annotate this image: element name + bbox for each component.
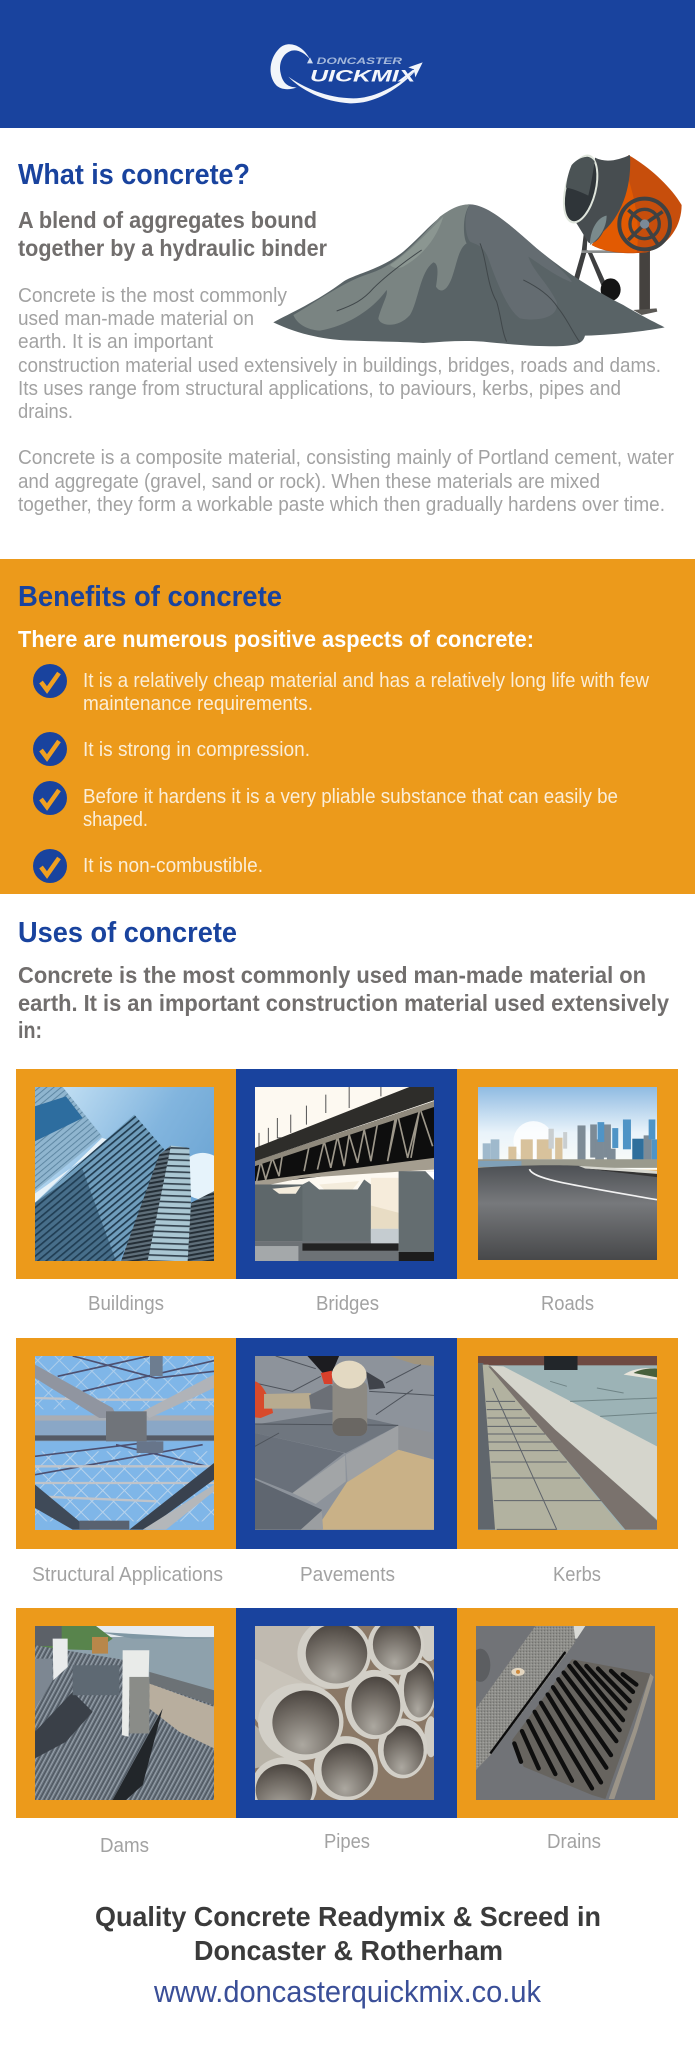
subheading: blend of aggregates: A blend of aggregates bound	[18, 207, 317, 233]
label: bridges: Bridges	[316, 1293, 379, 1315]
footer heading: Doncaster & Rotherham	[194, 1935, 503, 1966]
paragraph: most commonly used: construction material used extensively in buildings, bridges, roads and dams.	[18, 355, 661, 377]
heading: uses: Uses of concrete	[18, 917, 237, 949]
paragraph: composite material: Concrete is a composite material, consisting mainly of Portland cement, water	[18, 447, 674, 469]
photo: buildings	[35, 1087, 214, 1261]
benefit text 3: Before it hardens it is a very pliable substance that can easily be	[83, 786, 618, 808]
photo: pipes	[255, 1626, 434, 1800]
benefit text 2: It is strong in compression.	[83, 739, 310, 761]
paragraph: most commonly used: Its uses range from structural applications, to paviours, kerbs, pipes and	[18, 378, 621, 400]
subheading: blend of aggregates: together by a hydraulic binder	[18, 235, 327, 261]
subheading: positive aspects: There are numerous positive aspects of concrete:	[18, 626, 534, 652]
benefit text 3: shaped.	[83, 809, 148, 831]
label: roads: Roads	[541, 1293, 594, 1315]
logo: DONCASTER	[317, 56, 403, 66]
subheading: uses description: Concrete is the most commonly used man-made material on	[18, 962, 646, 988]
icon: check 1	[33, 664, 67, 698]
paragraph: composite material: and aggregate (gravel, sand or rock). When these materials are mixed	[18, 471, 600, 493]
footer heading: Quality Concrete Readymix & Screed in	[95, 1901, 601, 1932]
website url: www.doncasterquickmix.co.uk	[153, 1974, 541, 2009]
photo: steel structure	[35, 1356, 214, 1530]
benefit text 1	[83, 670, 650, 715]
paragraph: most commonly used: Concrete is the most commonly	[18, 285, 287, 307]
icon: cement mixer	[557, 151, 682, 315]
section: what is concrete	[18, 151, 682, 516]
paragraph: composite material: together, they form a workable paste which then gradually hardens over time.	[18, 494, 665, 516]
tile backgrounds	[16, 1069, 678, 1818]
panel: benefits of concrete	[0, 559, 695, 894]
photo: bridge	[255, 1087, 434, 1261]
heading: benefits: Benefits of concrete	[18, 581, 282, 613]
paragraph: composite material	[18, 447, 674, 516]
paragraph: most commonly used: drains.	[18, 401, 73, 423]
label: dams: Dams	[100, 1835, 149, 1857]
subheading: blend of aggregates	[18, 207, 327, 261]
footer call to action	[95, 1901, 601, 2009]
icon: aggregate pile	[273, 204, 665, 346]
benefit text 4: It is non-combustible.	[83, 855, 263, 877]
icon: check 2	[33, 732, 67, 766]
photo: dam	[35, 1626, 214, 1800]
subheading: uses description: earth. It is an important construction material used extensively	[18, 990, 669, 1016]
paragraph: most commonly used: used man-made material on	[18, 308, 254, 330]
benefit text 3	[83, 786, 618, 831]
photo: road	[478, 1087, 657, 1260]
panel: usage photo tiles	[16, 1069, 678, 1857]
photo: kerb	[478, 1356, 657, 1530]
illustration: concrete mixer and gravel pile	[273, 151, 682, 346]
benefit text 1: maintenance requirements.	[83, 693, 313, 715]
logo	[271, 44, 423, 103]
label: pavements: Pavements	[300, 1564, 395, 1586]
label: drains: Drains	[547, 1831, 601, 1853]
label: structural applications: Structural Applications	[32, 1564, 223, 1586]
benefit text 1: It is a relatively cheap material and has a relatively long life with few	[83, 670, 650, 692]
subheading: uses description: in:	[18, 1017, 42, 1043]
paragraph: most commonly used: earth. It is an important	[18, 331, 213, 353]
label: pipes: Pipes	[324, 1831, 370, 1853]
footer heading	[95, 1901, 601, 1966]
icon: check 4	[33, 849, 67, 883]
section: uses of concrete intro	[18, 917, 669, 1043]
icon: check 3	[33, 781, 67, 815]
heading: what is concrete: What is concrete?	[18, 159, 250, 191]
subheading: uses description	[18, 962, 669, 1043]
logo: UICKMIX	[310, 67, 417, 86]
photo: drain grate	[476, 1626, 655, 1800]
label: kerbs: Kerbs	[553, 1564, 601, 1586]
header band	[0, 0, 695, 128]
paragraph: most commonly used	[18, 285, 661, 423]
label: buildings: Buildings	[88, 1293, 164, 1315]
photo: paving	[255, 1356, 434, 1530]
